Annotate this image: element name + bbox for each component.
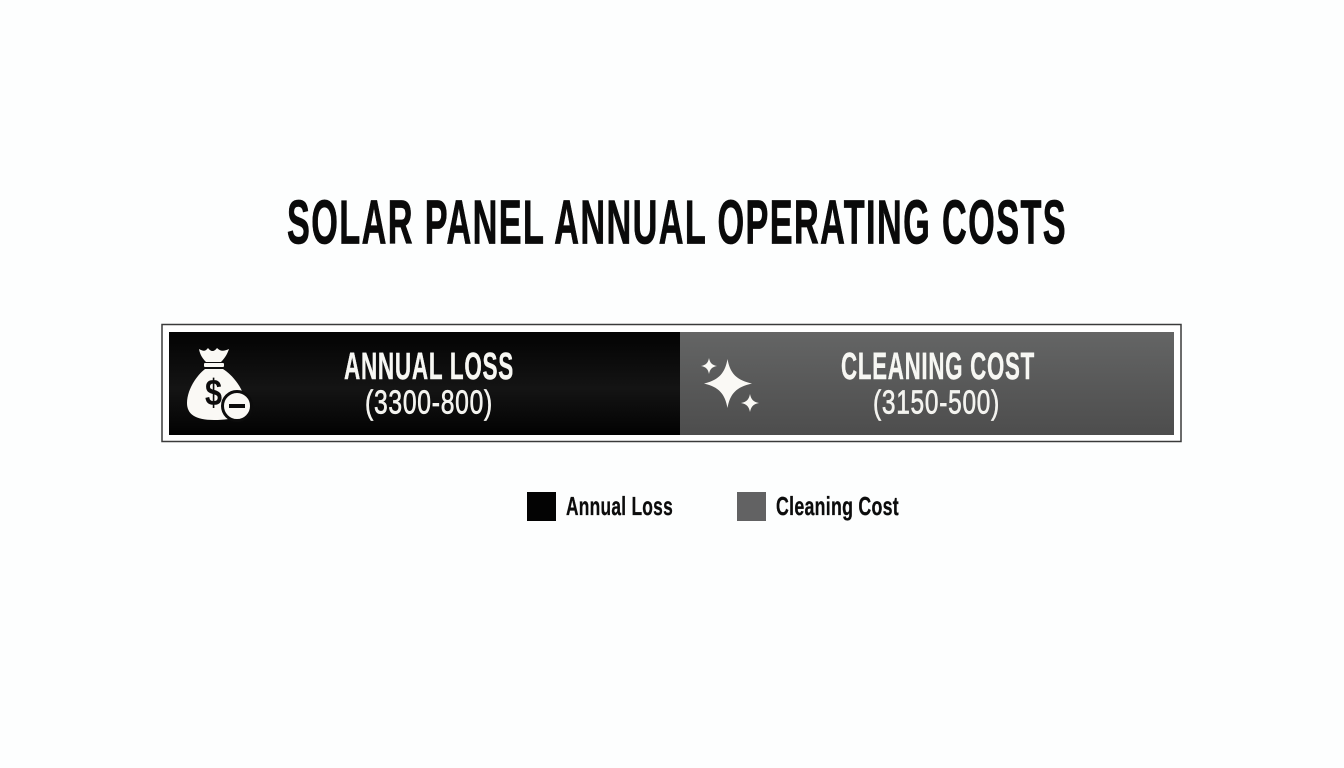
bar outer frame: [162, 324, 1181, 442]
annual loss range: (3300-800): [365, 384, 493, 420]
legend item: cleaning cost: [737, 491, 899, 521]
legend item: cleaning cost: Cleaning Cost: [776, 491, 899, 521]
icon: money bag with minus: [187, 348, 252, 420]
annual loss label: ANNUAL LOSS: [344, 346, 514, 388]
legend: [527, 491, 899, 521]
icon: sparkles: [701, 358, 759, 412]
cleaning cost label: CLEANING COST: [841, 346, 1035, 388]
cleaning cost range: (3150-500): [873, 384, 1000, 420]
stacked cost bar: [162, 324, 1181, 442]
panel: annual loss segment: [169, 332, 680, 435]
icon: money bag with minus: $: [205, 372, 222, 413]
legend item: annual loss: Annual Loss: [566, 491, 673, 521]
legend item: annual loss: [527, 491, 673, 521]
panel: cleaning cost segment: [680, 332, 1174, 435]
